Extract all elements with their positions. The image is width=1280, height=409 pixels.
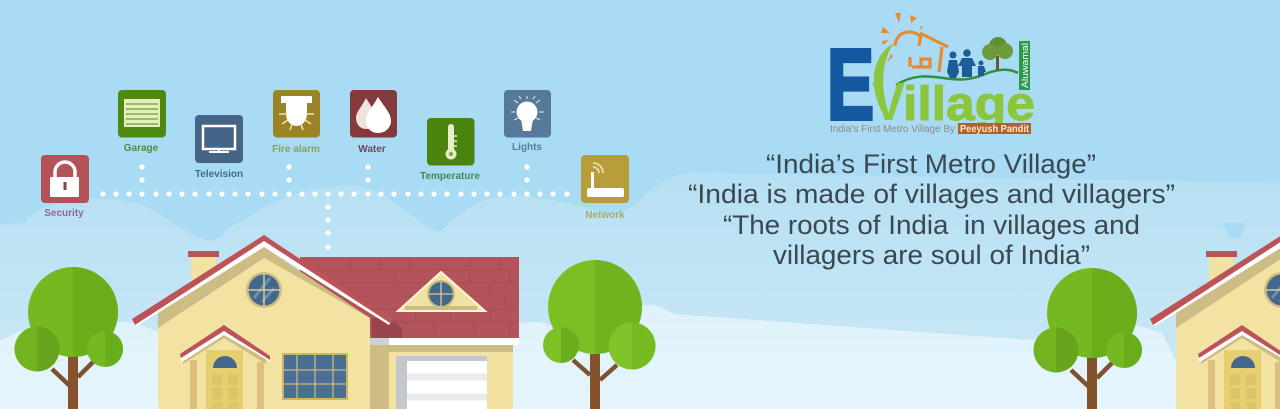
tree: right xyxy=(1034,268,1142,409)
label: Network: Network xyxy=(585,210,625,221)
icon: security xyxy=(41,155,89,219)
lower cloud layer xyxy=(0,305,1200,409)
tree: centre xyxy=(543,260,656,409)
label: Lights: Lights xyxy=(512,142,542,153)
house: right xyxy=(1150,223,1280,409)
quote text block: “The roots of India in villages and xyxy=(723,210,1140,240)
icon: network xyxy=(581,155,629,221)
icon: fire alarm xyxy=(272,90,320,155)
logo: V letter: V xyxy=(872,72,905,132)
logo: tree xyxy=(982,37,1013,70)
quote text block xyxy=(688,149,1175,270)
icon: lights xyxy=(504,90,551,153)
label: Fire alarm: Fire alarm xyxy=(272,144,320,155)
quote text block: “India is made of villages and villagers” xyxy=(688,179,1175,209)
dotted connector lines xyxy=(100,164,570,250)
label: Television: Television xyxy=(195,169,243,180)
logo: E letter: E xyxy=(827,29,874,141)
icon: temperature xyxy=(420,118,480,182)
logo xyxy=(827,13,1035,141)
logo: swoosh xyxy=(874,43,894,112)
label: Temperature: Temperature xyxy=(420,171,480,182)
label: Water: Water xyxy=(358,144,386,155)
quote text block: villagers are soul of India” xyxy=(773,240,1090,270)
label: Garage: Garage xyxy=(124,143,159,154)
logo: sun rays xyxy=(881,13,923,63)
icon: garage xyxy=(118,90,166,154)
tree: left xyxy=(14,267,123,409)
logo: Aluwamal tag: Aluwamal xyxy=(1020,43,1030,88)
logo: author tag: Peeyush Pandit xyxy=(960,124,1030,135)
logo: family xyxy=(947,49,986,78)
label: Security: Security xyxy=(44,208,84,219)
logo: illage word: illage xyxy=(903,78,1035,131)
logo: tagline: India's First Metro Village By xyxy=(830,124,955,135)
house: left xyxy=(132,223,519,409)
quote text block: “India’s First Metro Village” xyxy=(766,149,1096,179)
mid cloud layer xyxy=(0,173,1280,409)
icon: television xyxy=(195,115,243,180)
logo: green hill xyxy=(896,70,1018,85)
icon: water xyxy=(350,90,397,155)
logo: sun and house outline xyxy=(895,32,948,72)
